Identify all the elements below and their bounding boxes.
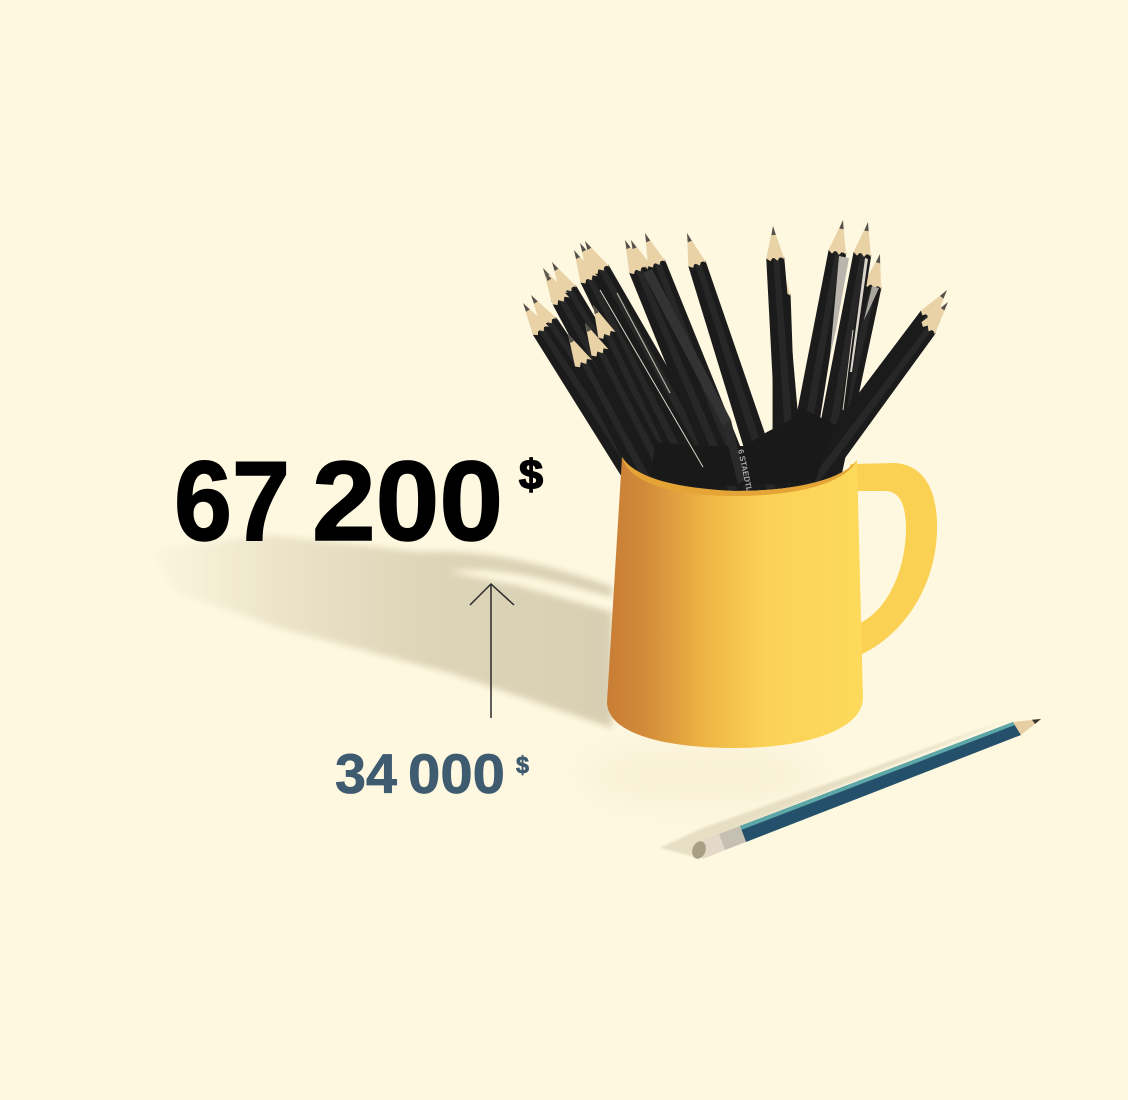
main value: 67 200 $ [174, 438, 543, 564]
pencil body [740, 722, 1021, 842]
ferrule [719, 826, 746, 850]
pencil mass near the rim [650, 408, 835, 490]
previous value: 34 000 $: $ [516, 752, 530, 779]
mug cast shadow [150, 535, 820, 803]
pencil brand lettering: 6 STAEDTLER [736, 449, 756, 504]
main value: 67 200 $: 200 [312, 438, 503, 564]
silver facets [830, 256, 879, 372]
mug rim [622, 457, 857, 496]
previous value: 34 000 $: 000 [408, 742, 505, 805]
pencils in the mug [511, 218, 959, 623]
mug body [607, 457, 863, 748]
up arrow [470, 584, 514, 718]
pencil shadow [660, 718, 1012, 858]
yellow mug [607, 457, 937, 748]
main value: 67 200 $: $ [519, 451, 543, 498]
previous value: 34 000 $ [335, 742, 530, 805]
pencil wood tip [1013, 719, 1041, 735]
pencil highlights [600, 269, 853, 484]
main value: 67 200 $: 67 [174, 438, 290, 564]
mug handle [850, 463, 937, 656]
previous value: 34 000 $: 34 [335, 742, 397, 805]
blue pencil on table [660, 718, 1041, 861]
eraser [697, 834, 725, 859]
